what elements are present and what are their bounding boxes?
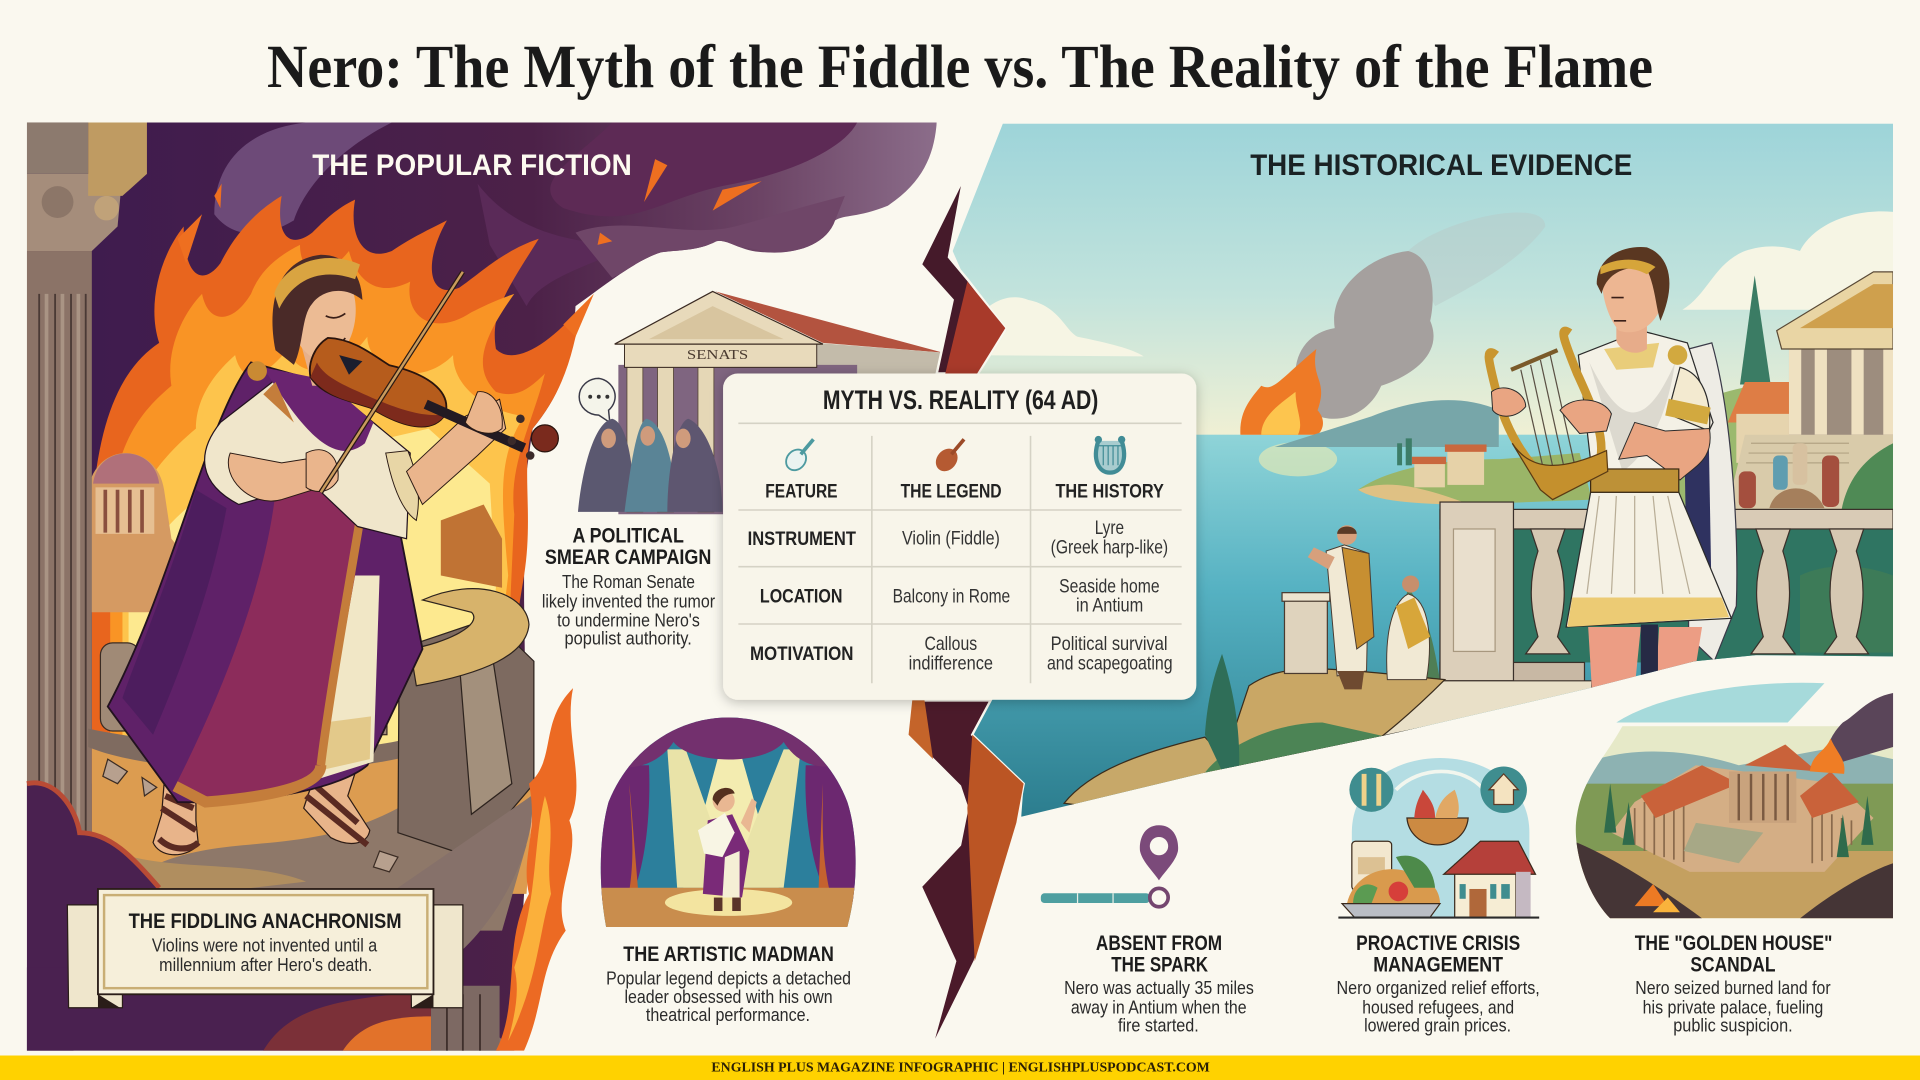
distant fire	[1240, 349, 1323, 435]
table row: motivation	[750, 634, 1173, 674]
distant smoke	[1408, 212, 1545, 306]
crack divider: lower	[909, 700, 1024, 1051]
text block: absent from the spark: THE SPARK	[1111, 954, 1208, 977]
icon: speech bubble	[579, 378, 615, 422]
title: Nero: The Myth of the Fiddle vs. The Reality of the Flame	[267, 33, 1653, 101]
text block: a political smear campaign: The Roman Senate	[562, 571, 695, 592]
figure: nero with lyre	[1489, 247, 1737, 688]
text block: proactive crisis management	[1337, 932, 1540, 1036]
text block: a political smear campaign: likely invented the rumor	[542, 590, 715, 611]
panel: the historical evidence illustration	[943, 122, 1898, 827]
text block: the golden house scandal: his private palace, fueling	[1643, 996, 1823, 1017]
table row: location: Seaside home	[1059, 576, 1160, 597]
text block: absent from the spark: Nero was actually 35 miles	[1064, 977, 1254, 998]
senate inscription: SENATS	[687, 347, 748, 362]
table row: motivation: MOTIVATION	[750, 643, 853, 665]
text block: the golden house scandal: SCANDAL	[1690, 954, 1776, 977]
balustrade	[1382, 502, 1893, 736]
text block: the golden house scandal: Nero seized burned land for	[1635, 977, 1831, 998]
table row: instrument: (Greek harp-like)	[1051, 537, 1168, 558]
flames behind nero	[92, 196, 582, 784]
table row: motivation: Callous	[924, 634, 977, 655]
banner body text	[152, 934, 378, 975]
cliff and cypress	[1064, 525, 1445, 808]
table header row: THE HISTORY	[1056, 481, 1164, 503]
illustration: golden house palace	[1567, 683, 1898, 918]
embers	[178, 159, 762, 337]
text block: a political smear campaign: A POLITICAL	[572, 524, 684, 547]
panel: the popular fiction illustration	[27, 122, 945, 1053]
table row: motivation: and scapegoating	[1047, 653, 1173, 674]
table row: location: LOCATION	[760, 585, 842, 607]
text block: the artistic madman	[606, 943, 851, 1025]
burning city	[88, 453, 502, 612]
text block: the golden house scandal: public suspicion.	[1673, 1015, 1793, 1036]
table row: location	[760, 576, 1160, 617]
table row: motivation: Political survival	[1051, 634, 1168, 655]
clouds	[960, 211, 1893, 356]
table row: instrument: INSTRUMENT	[748, 528, 856, 550]
footer bar	[0, 1056, 1920, 1080]
figure: nero with violin	[108, 255, 558, 855]
right side flames	[496, 688, 576, 1051]
text block: proactive crisis management: PROACTIVE CRISIS	[1356, 932, 1520, 955]
table row: instrument: Lyre	[1095, 518, 1124, 539]
text block: proactive crisis management: Nero organized relief efforts,	[1337, 977, 1540, 998]
icon: relief food and shelter	[1338, 758, 1539, 919]
crack divider: upper	[921, 178, 1005, 373]
text block: a political smear campaign: populist authority.	[564, 628, 692, 649]
text block: the artistic madman: THE ARTISTIC MADMAN	[623, 943, 834, 966]
section heading: the historical evidence: THE HISTORICAL EVIDENCE	[1250, 149, 1632, 182]
background temple and crowd	[1679, 388, 1742, 506]
banner heading: THE FIDDLING ANACHRONISM	[129, 910, 402, 933]
icon: outlined violin	[782, 433, 820, 474]
icon: lyre	[1095, 436, 1125, 473]
text block: the golden house scandal: THE "GOLDEN HOUSE"	[1635, 932, 1832, 955]
illustration: senate with rumor-spreading citizens	[578, 291, 943, 514]
text block: absent from the spark: fire started.	[1118, 1015, 1199, 1036]
balcony	[27, 589, 534, 1051]
table title: MYTH VS. REALITY (64 AD)	[823, 385, 1098, 415]
column	[27, 122, 147, 900]
table row: location: in Antium	[1076, 596, 1143, 617]
text block: the artistic madman: leader obsessed with his own	[624, 986, 833, 1007]
panel: myth vs reality table	[723, 373, 1196, 700]
text block: proactive crisis management: MANAGEMENT	[1373, 954, 1503, 977]
hills and peninsula	[1275, 400, 1499, 447]
panel: the fiddling anachronism banner	[67, 889, 463, 1008]
text block: the golden house scandal	[1635, 932, 1832, 1036]
illustration: nero on stage	[598, 715, 860, 929]
icon: location pin and distance bar	[1041, 825, 1178, 907]
table row: motivation: indifference	[909, 653, 993, 674]
text block: proactive crisis management: housed refugees, and	[1362, 996, 1514, 1017]
table header row: FEATURE	[765, 481, 838, 503]
text block: absent from the spark: ABSENT FROM	[1096, 932, 1222, 955]
section heading: the popular fiction: THE POPULAR FICTION	[312, 149, 632, 182]
text block: absent from the spark: away in Antium when the	[1071, 996, 1247, 1017]
table row: instrument	[748, 518, 1168, 558]
footer bar: ENGLISH PLUS MAGAZINE INFOGRAPHIC | ENGLISHPLUSPODCAST.COM	[711, 1059, 1210, 1075]
text block: the artistic madman: theatrical performance.	[646, 1004, 810, 1025]
table row: location: Balcony in Rome	[893, 586, 1010, 607]
banner body text: Violins were not invented until a	[152, 934, 378, 955]
text block: a political smear campaign: to undermine Nero's	[557, 609, 700, 630]
text block: absent from the spark	[1064, 932, 1254, 1036]
table row: instrument: Violin (Fiddle)	[902, 528, 1000, 549]
text block: proactive crisis management: lowered grain prices.	[1364, 1015, 1511, 1036]
text block: a political smear campaign: SMEAR CAMPAIGN	[545, 546, 711, 569]
banner body text: millennium after Hero's death.	[159, 954, 372, 975]
text block: a political smear campaign	[542, 524, 715, 649]
text block: the artistic madman: Popular legend depicts a detached	[606, 967, 851, 988]
table header row: THE LEGEND	[901, 481, 1002, 503]
table header row	[765, 481, 1164, 503]
icon: brown violin	[931, 433, 972, 476]
